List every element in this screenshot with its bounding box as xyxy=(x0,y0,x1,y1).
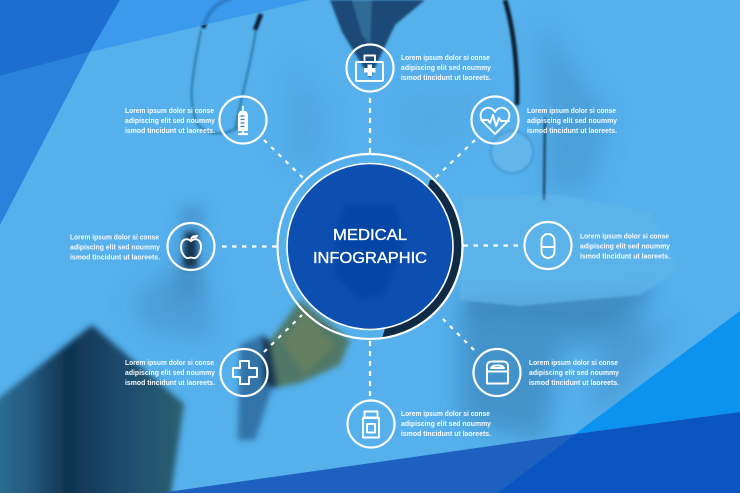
text: cross: Lorem ipsum dolor si conse xyxy=(125,358,214,367)
title: INFOGRAPHIC xyxy=(313,250,427,267)
text: scale: Lorem ipsum dolor si conse xyxy=(529,358,618,367)
text: bottle xyxy=(401,409,492,438)
item: apple xyxy=(168,223,214,270)
item: heart xyxy=(472,96,518,144)
text: first aid kit: adipiscing elit sed noummy xyxy=(401,63,492,72)
text: first aid kit: Lorem ipsum dolor si conse xyxy=(401,53,490,62)
item: syringe xyxy=(220,96,266,144)
icon: heart pulse xyxy=(481,108,509,134)
text: apple: adipiscing elit sed noummy xyxy=(70,242,161,252)
icon: apple xyxy=(181,235,201,258)
text: heart: adipiscing elit sed noummy xyxy=(527,116,618,125)
text: apple: ismod tincidunt ut laoreets. xyxy=(70,252,160,262)
central badge xyxy=(278,154,462,339)
text: first aid kit: ismod tincidunt ut laoreets. xyxy=(401,73,491,82)
item: scale xyxy=(474,349,520,396)
icon: capsule xyxy=(542,234,554,258)
text: bottle: adipiscing elit sed noummy xyxy=(401,419,492,428)
text: syringe: adipiscing elit sed noummy xyxy=(125,116,216,125)
icon: syringe xyxy=(238,106,248,134)
icon: medical cross xyxy=(233,361,257,384)
text: apple xyxy=(70,232,161,262)
text: pill: adipiscing elit sed noummy xyxy=(580,242,671,250)
panel: bottom-right geometric overlay xyxy=(160,311,740,493)
connector lines xyxy=(222,98,518,399)
text: bottle: ismod tincidunt ut laoreets. xyxy=(401,429,491,438)
text: cross: adipiscing elit sed noummy xyxy=(125,368,216,377)
text: syringe: ismod tincidunt ut laoreets. xyxy=(125,126,215,135)
text: bottle: Lorem ipsum dolor si conse xyxy=(401,409,490,418)
icon: medicine bottle xyxy=(363,412,379,438)
item: bottle xyxy=(348,400,394,448)
text: syringe: Lorem ipsum dolor si conse xyxy=(125,106,214,115)
text: heart: Lorem ipsum dolor si conse xyxy=(527,106,616,115)
item: pill xyxy=(524,222,572,269)
text: pill: Lorem ipsum dolor si conse xyxy=(580,232,669,240)
text: heart xyxy=(527,106,618,135)
text: scale: adipiscing elit sed noummy xyxy=(529,368,620,377)
title: MEDICAL xyxy=(333,227,407,244)
text: pill xyxy=(580,232,671,260)
text: first aid kit xyxy=(401,53,492,82)
text: syringe xyxy=(125,106,216,135)
panel: top-left geometric overlay xyxy=(0,0,310,225)
item: first aid kit xyxy=(346,44,394,92)
icon: first aid kit xyxy=(356,56,383,81)
text: scale: ismod tincidunt ut laoreets. xyxy=(529,378,619,387)
item: cross xyxy=(220,349,268,396)
text: apple: Lorem ipsum dolor si conse xyxy=(70,232,159,242)
text: scale xyxy=(529,358,620,387)
icon: weighing scale xyxy=(487,362,508,384)
text: cross xyxy=(125,358,216,387)
text: pill: ismod tincidunt ut laoreets. xyxy=(580,252,670,260)
text: heart: ismod tincidunt ut laoreets. xyxy=(527,126,617,135)
title xyxy=(313,227,427,267)
text: cross: ismod tincidunt ut laoreets. xyxy=(125,378,215,387)
